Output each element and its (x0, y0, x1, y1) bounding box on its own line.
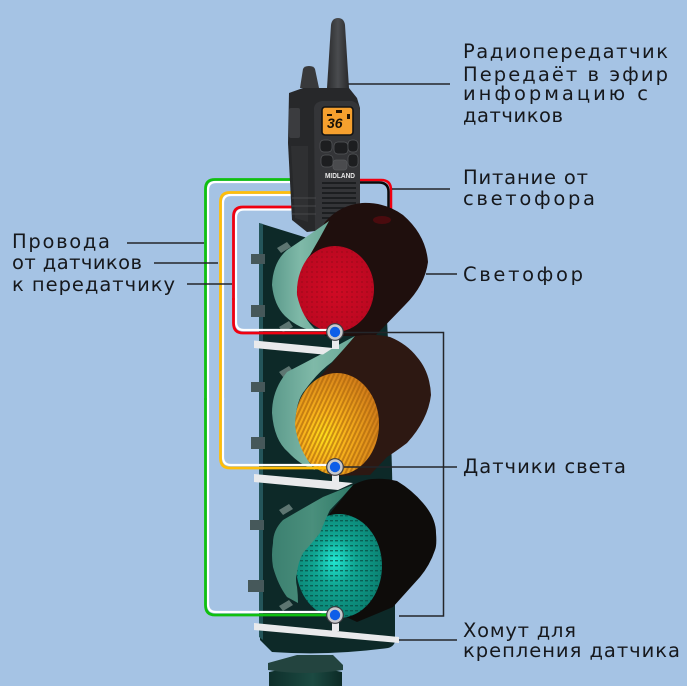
yellow lens (295, 373, 379, 475)
label: power: Питание от (463, 166, 588, 189)
label: clamp: крепления датчика (463, 639, 680, 662)
red lens (296, 246, 374, 332)
wires from sensors to transmitter (upper runs) (206, 180, 391, 400)
antenna (327, 18, 349, 88)
label: radio transmitter: Передаёт в эфир (463, 63, 668, 86)
green lens (296, 514, 382, 618)
leader lines (127, 84, 457, 640)
label: light sensors: Датчики света (463, 455, 626, 478)
front panel (314, 101, 360, 230)
label: power: светофора (463, 187, 595, 210)
keypad (320, 140, 358, 170)
green visor (272, 485, 353, 603)
label: clamp (463, 619, 680, 662)
wires from sensors to transmitter (lower runs) (206, 298, 330, 615)
traffic light back plate (248, 223, 395, 653)
label: power (463, 166, 595, 210)
label: traffic light: Светофор (463, 263, 583, 286)
body rear (288, 88, 360, 232)
side panel (291, 146, 308, 222)
red wire (234, 298, 330, 333)
yellow visor (272, 336, 355, 470)
radio transmitter: 36 (327, 115, 343, 131)
knob (300, 66, 319, 88)
traffic light pole (268, 655, 343, 686)
sensor: green (327, 607, 343, 623)
label: radio transmitter: информацию с (463, 82, 648, 105)
sensor: red (327, 324, 343, 340)
label: radio transmitter: Радиопередатчик (463, 40, 668, 63)
red signal head (272, 203, 428, 336)
radio transmitter: MIDLAND (325, 173, 355, 180)
label: radio transmitter (463, 40, 668, 127)
label: wires (12, 230, 175, 296)
sensor: yellow (327, 459, 343, 475)
label: wires: Провода (12, 230, 110, 253)
radio transmitter (288, 18, 360, 232)
label: clamp: Хомут для (463, 619, 576, 642)
label: wires: от датчиков (12, 251, 142, 274)
red visor (272, 221, 329, 331)
display (322, 107, 353, 135)
yellow wire (220, 398, 330, 468)
green wire (206, 398, 330, 615)
speaker grille (322, 183, 356, 218)
label: wires: к передатчику (12, 273, 175, 296)
yellow signal head (272, 335, 431, 476)
clamps (254, 340, 399, 643)
label: radio transmitter: датчиков (463, 104, 563, 127)
green signal head (272, 479, 436, 622)
side grip (289, 108, 300, 138)
